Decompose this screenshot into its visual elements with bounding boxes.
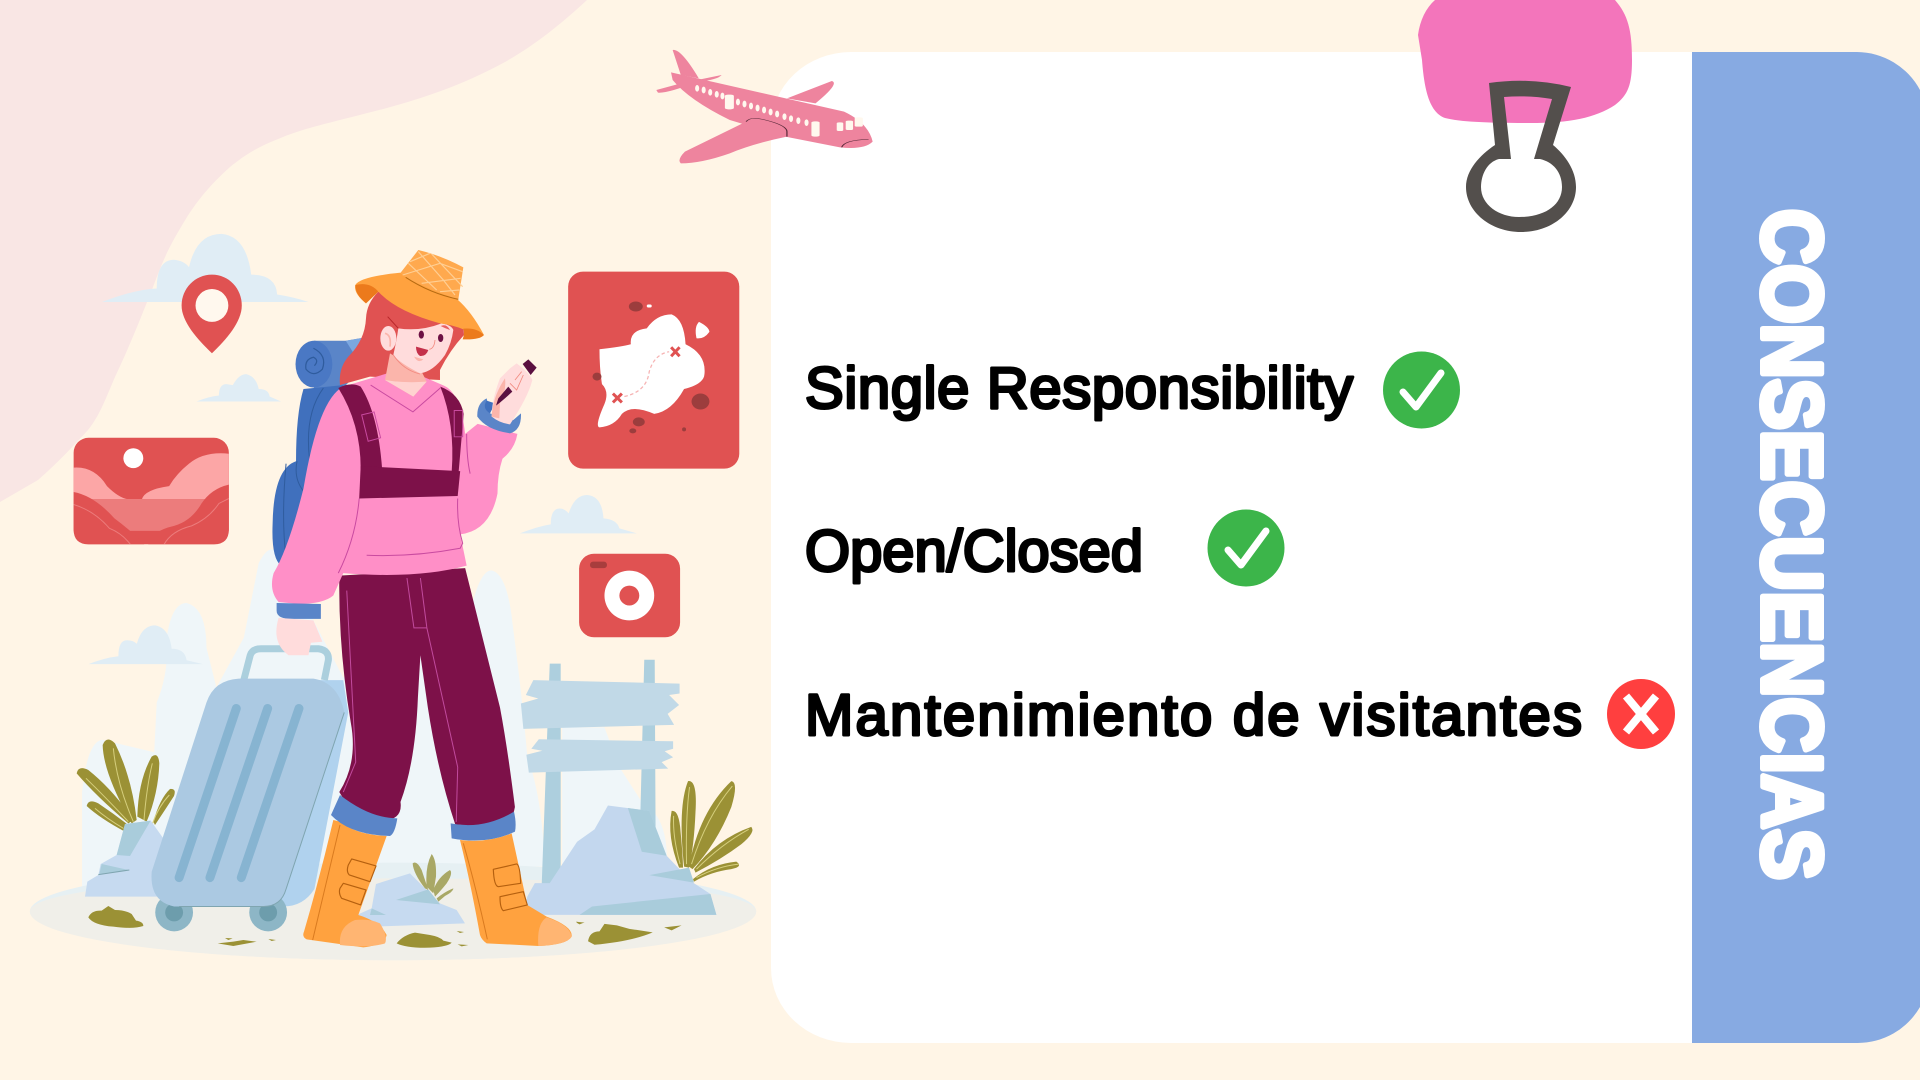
clouds	[89, 234, 637, 664]
text: Open/Closed: Open/Closed	[805, 519, 1143, 584]
left cuff and hand	[277, 603, 321, 619]
straps	[338, 384, 382, 469]
right plant	[670, 781, 752, 882]
text: Single Responsibility: Single Responsibility	[805, 356, 1353, 421]
ground shadow	[30, 863, 756, 960]
illustration: traveller scene	[30, 234, 756, 960]
icon: treasure map card	[568, 272, 739, 469]
boots and cuffs	[303, 795, 572, 947]
suitcase	[152, 649, 348, 931]
right rock	[522, 805, 716, 915]
left plant and rock	[77, 740, 175, 897]
signpost	[521, 660, 680, 896]
icon: red cross	[1607, 679, 1675, 749]
panel: white content card	[771, 52, 1692, 1043]
background mountains	[82, 549, 667, 887]
ground tufts	[88, 906, 682, 948]
vertical heading: CONSECUENCIAS: CONSECUENCIAS	[1745, 209, 1839, 880]
text: Mantenimiento de visitantes: Mantenimiento de visitantes	[805, 683, 1582, 748]
sweater	[272, 373, 517, 604]
icon: binder clip	[1418, 0, 1632, 232]
traveller figure	[272, 250, 572, 947]
head and raised hand	[355, 250, 537, 433]
backpack	[272, 338, 363, 566]
icon: airplane	[656, 50, 873, 163]
hair	[340, 292, 464, 385]
icon: map pin	[182, 275, 242, 353]
panel: blue side band	[1692, 52, 1920, 1043]
icon: camera card	[579, 554, 680, 637]
icon: landscape photo card	[74, 438, 229, 544]
icon: green check 2	[1208, 510, 1284, 586]
icon: green check 1	[1383, 352, 1460, 428]
trousers	[339, 568, 515, 828]
small centre rock and plant	[357, 854, 465, 927]
